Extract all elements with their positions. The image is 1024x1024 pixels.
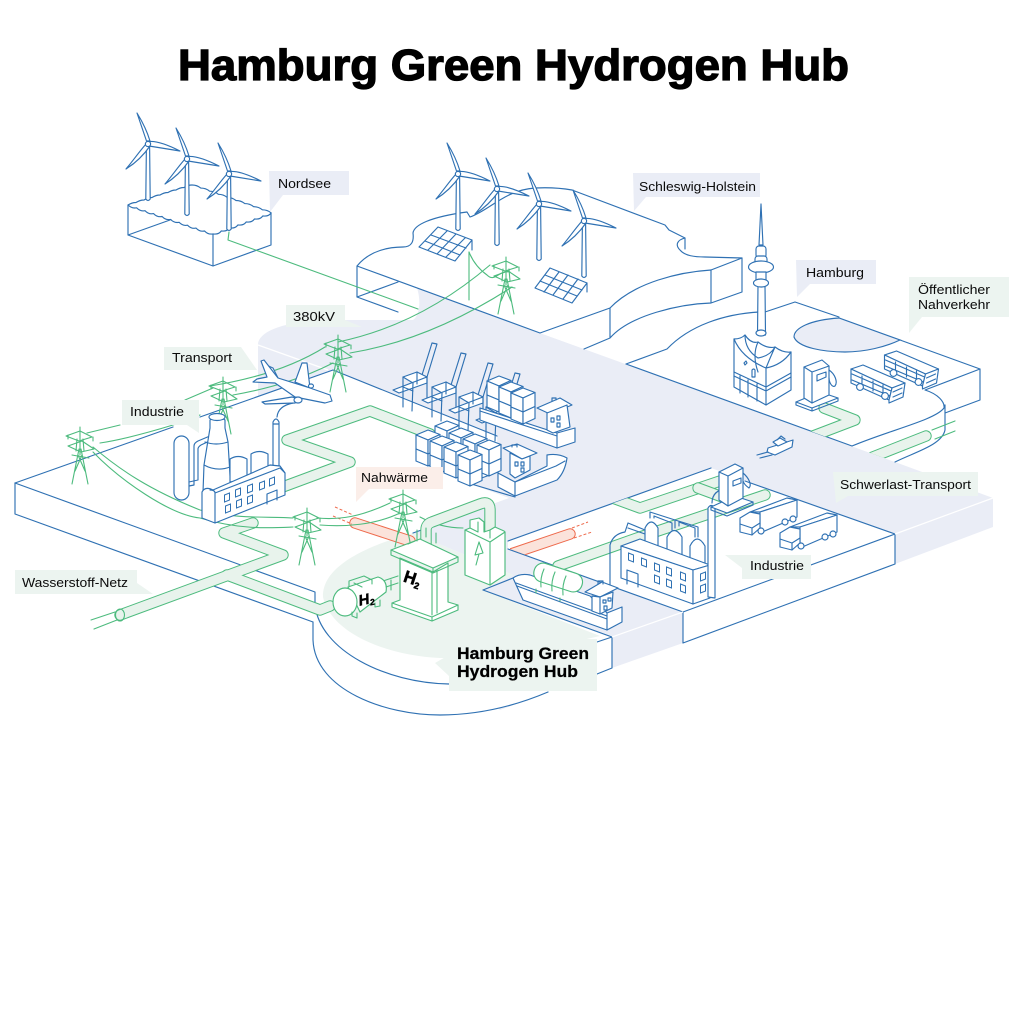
pipes in industry quarter (558, 481, 765, 566)
label: Öffentlicher Nahverkehr (909, 277, 1009, 333)
label: Nahwärme: Nahwärme (361, 470, 428, 485)
green hub area (323, 533, 600, 658)
offshore cable (228, 232, 418, 309)
hydrogen pipe electrolyser to battery (426, 503, 490, 545)
label: 380kV (286, 305, 362, 327)
truck 2 (780, 513, 837, 550)
factory left (174, 403, 293, 523)
cargo ship at the quay (498, 444, 567, 496)
label: Hamburg (796, 260, 876, 297)
hydrogen pipeline: to the port (280, 411, 430, 488)
label: Wasserstoff-Netz: Wasserstoff-Netz (22, 575, 128, 590)
compressor label H2: H (357, 591, 371, 610)
land: Hamburg (626, 302, 980, 462)
label: Hamburg Green Hydrogen Hub (435, 639, 597, 691)
pylons (66, 252, 520, 565)
fuel dispenser Hamburg (796, 360, 838, 411)
label: Schleswig-Holstein: Schleswig-Holstein (639, 179, 756, 194)
hydrogen pipeline: west network (91, 523, 330, 629)
pipes in Hamburg (800, 408, 926, 464)
title: Hamburg Green Hydrogen Hub (178, 41, 849, 90)
Elbphilharmonie (734, 335, 791, 405)
airplane (253, 360, 332, 404)
district heat pipe east (505, 522, 592, 556)
label: Hamburg Green Hydrogen Hub: Hamburg Green (457, 645, 589, 663)
label: Öffentlicher Nahverkehr: Nahverkehr (918, 297, 991, 312)
label: Schwerlast-Transport: Schwerlast-Transport (840, 477, 971, 492)
solar panel 1 (419, 227, 472, 261)
electrolyser H2 (391, 528, 458, 621)
truck 1 (740, 498, 797, 535)
label: Nordsee (269, 171, 349, 212)
containers on the quay (416, 421, 501, 486)
land: Schleswig-Holstein (357, 188, 742, 364)
hydrogen ship (513, 561, 622, 630)
label: Nahwärme (356, 467, 443, 502)
factory right (610, 506, 715, 604)
power lines (87, 252, 512, 528)
label: Industrie east: Industrie (750, 558, 804, 573)
Nordsee water block (128, 185, 271, 266)
label: Hamburg: Hamburg (806, 265, 864, 280)
district heat pipe west (333, 507, 410, 541)
label: Schleswig-Holstein (633, 173, 760, 211)
pond (794, 318, 900, 352)
compressor label H2: 2 (368, 597, 376, 608)
electrolyser label H2: H (401, 567, 419, 589)
label: 380kV: 380kV (293, 309, 335, 324)
container ship with containers (480, 376, 575, 448)
electrolyser label H2: 2 (413, 580, 421, 591)
label: Öffentlicher Nahverkehr: Öffentlicher (918, 282, 991, 297)
label: Transport: Transport (172, 350, 232, 365)
land: industry quarter (508, 468, 895, 643)
label: Industrie east (725, 555, 811, 579)
bus 1 (851, 365, 905, 403)
label: Wasserstoff-Netz (15, 570, 153, 594)
label: Hamburg Green Hydrogen Hub: Hydrogen Hub (457, 663, 578, 681)
label: Transport (164, 347, 257, 370)
pipe ends past Hamburg (932, 421, 955, 439)
onshore wind turbines (436, 143, 616, 278)
label: Industrie west (122, 400, 199, 433)
solar panel 2 (535, 268, 587, 303)
fuel dispenser industry (711, 464, 753, 516)
offshore wind turbines (126, 113, 261, 230)
small ship on the Elbe (757, 436, 793, 458)
compressor H2 (333, 576, 398, 618)
label: Nordsee: Nordsee (278, 176, 331, 191)
battery storage (465, 518, 505, 585)
port cranes (393, 343, 520, 441)
land: hydrogen hub peninsula (15, 370, 612, 716)
water: elbe river (258, 288, 993, 710)
label: Schwerlast-Transport (833, 472, 978, 503)
Hamburg TV tower (748, 204, 774, 336)
bus 2 (884, 351, 938, 389)
label: Industrie west: Industrie (130, 404, 184, 419)
